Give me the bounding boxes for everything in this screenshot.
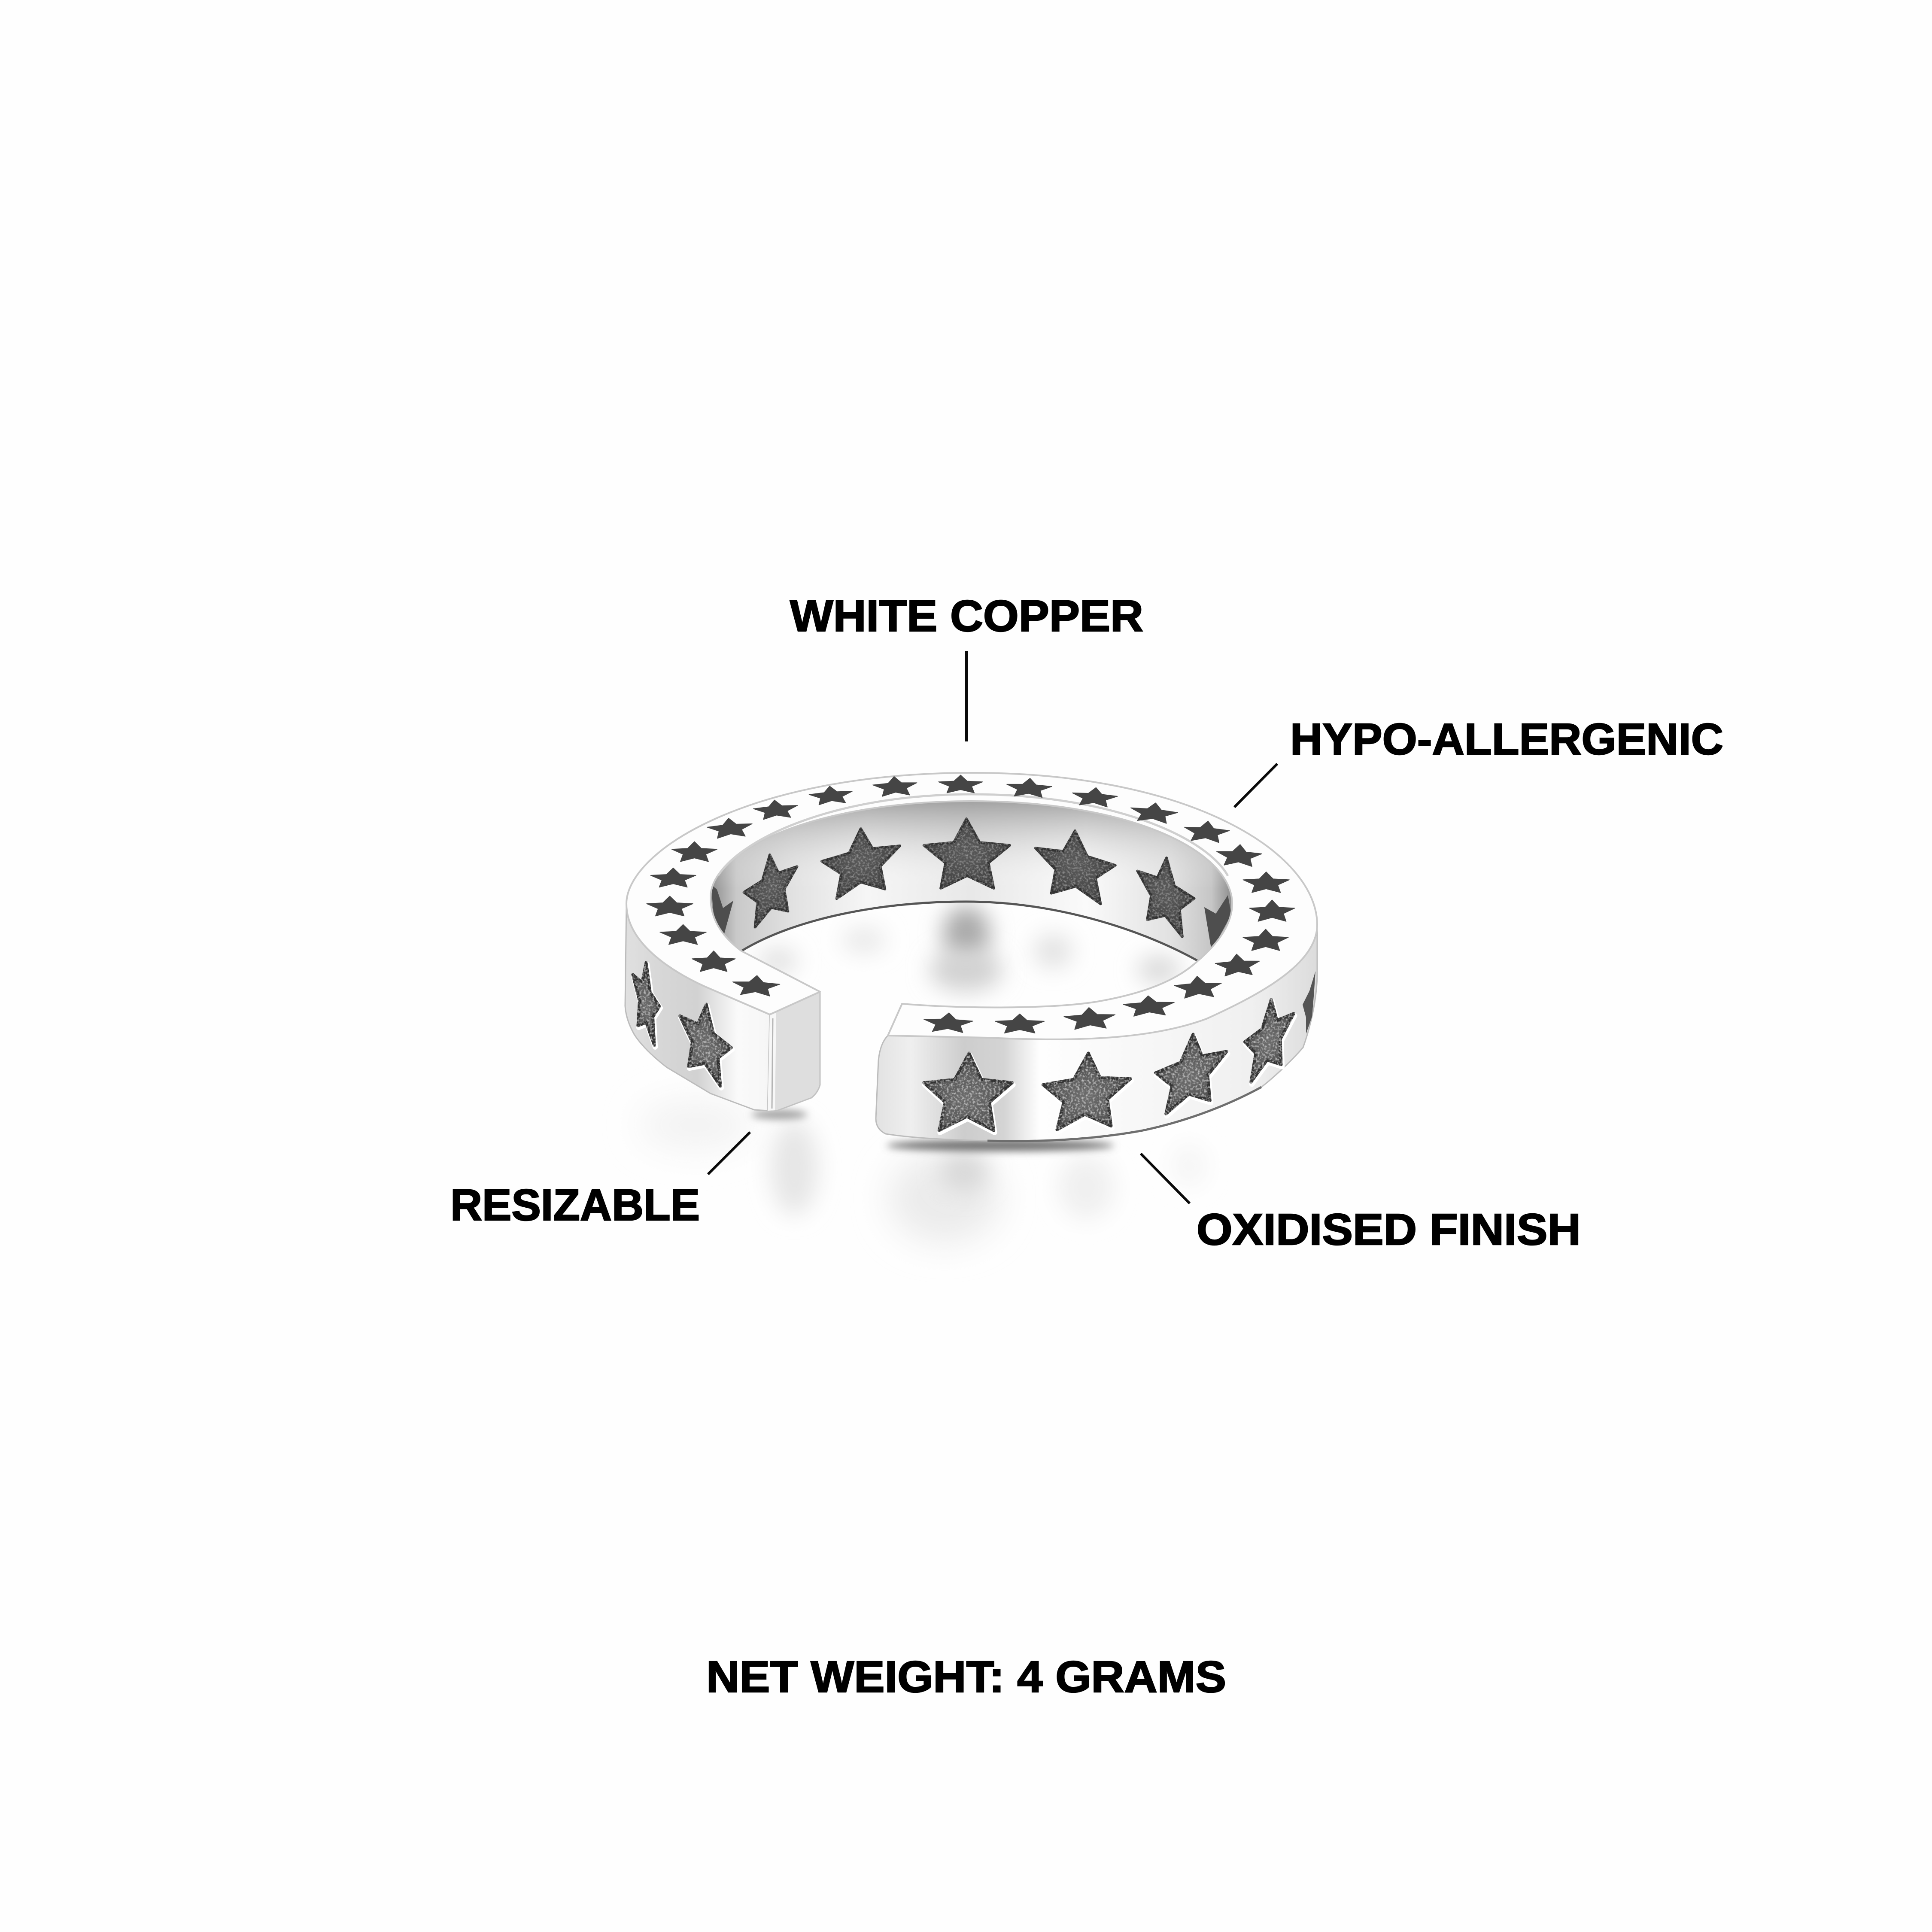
floor reflection under ring: [640, 906, 1206, 1243]
top surface stars: [647, 775, 1295, 1033]
top surface of ring: [626, 773, 1317, 1039]
right outer band: [876, 925, 1317, 1141]
right band star highlights: [923, 987, 1297, 1133]
partial star at right edge: [1303, 971, 1315, 1034]
ring product illustration: [625, 773, 1317, 1243]
net weight caption: NET WEIGHT: 4 GRAMS: [706, 1652, 1226, 1701]
inner rim line: [718, 794, 1228, 876]
label: white copper: WHITE COPPER: [790, 591, 1143, 641]
label: oxidised finish: [1141, 1154, 1581, 1254]
left band stars: [633, 947, 732, 1092]
label: hypo-allergenic: [1234, 714, 1723, 807]
band bottom edge line: [987, 1087, 1261, 1141]
left outer band: [625, 904, 770, 1111]
inner wall of ring: [711, 801, 1232, 961]
label: hypo-allergenic: HYPO-ALLERGENIC: [1290, 714, 1723, 764]
label: oxidised finish: OXIDISED FINISH: [1197, 1205, 1581, 1254]
partial wall stars at the curve edges: [711, 884, 1231, 951]
cut end face: [768, 992, 820, 1111]
inner wall stars: [743, 819, 1195, 942]
wall lower edge line: [741, 902, 1198, 961]
label: resizable: [450, 1132, 750, 1230]
label: resizable: RESIZABLE: [450, 1180, 700, 1230]
left band star highlights: [634, 948, 733, 1094]
right band stars: [922, 985, 1296, 1131]
